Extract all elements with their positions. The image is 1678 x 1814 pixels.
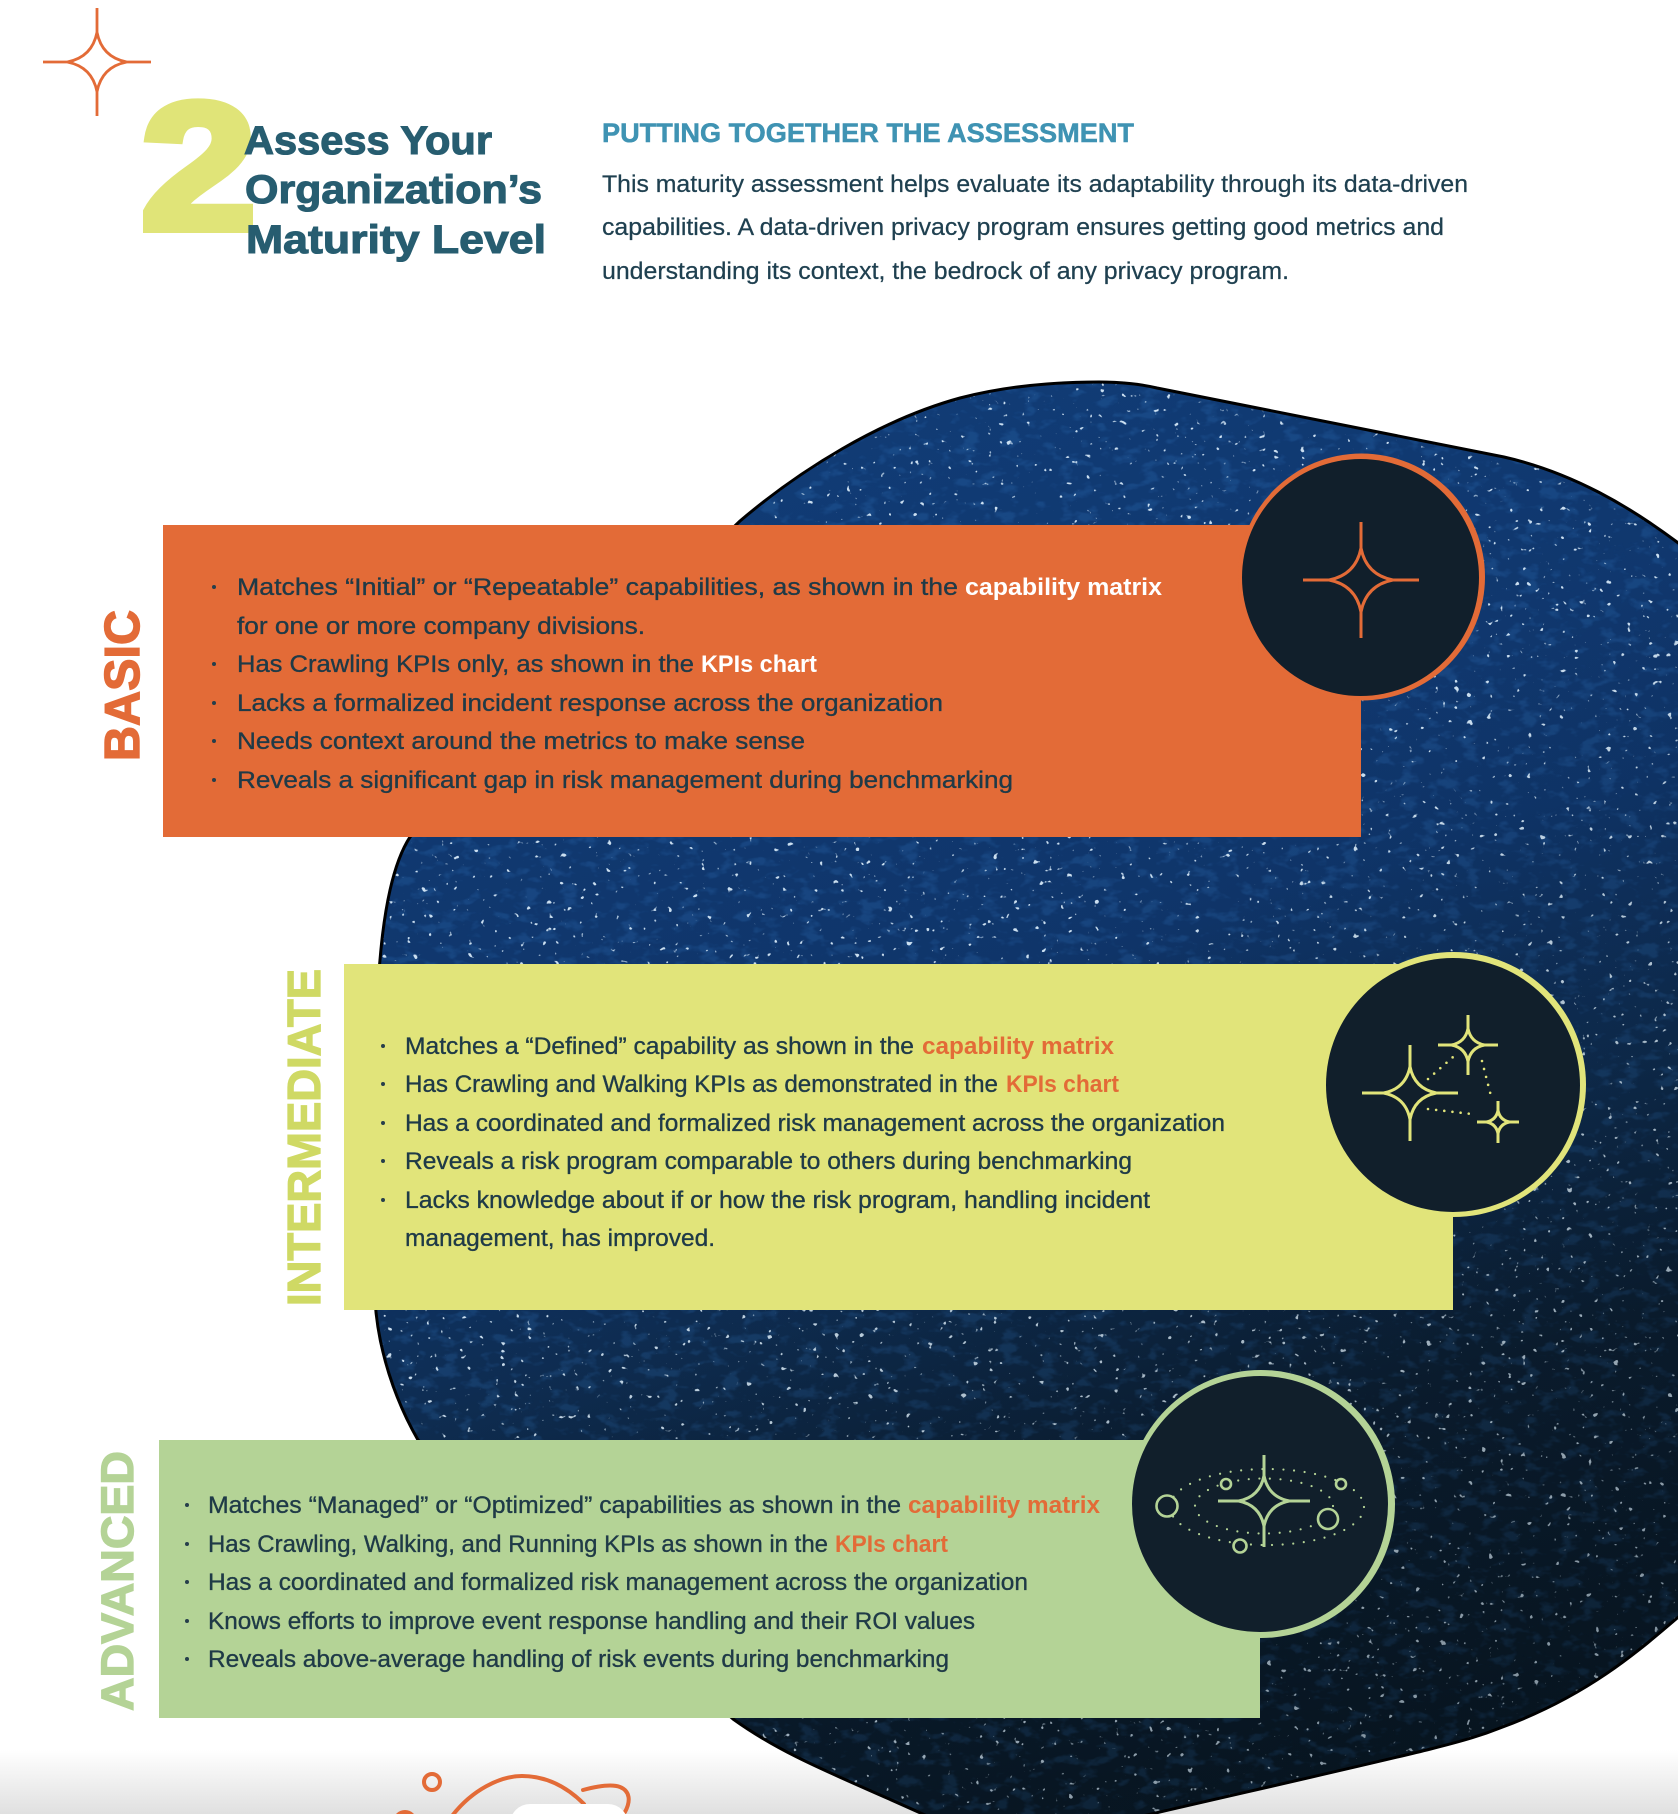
- bottom grey fade: [0, 1750, 1678, 1814]
- intro paragraph: [602, 171, 1468, 285]
- title: [244, 119, 546, 262]
- advanced list: [185, 1492, 1101, 1673]
- intermediate list: Reveals a risk program comparable to others during benchmarking: [405, 1148, 1132, 1175]
- advanced list: Reveals above-average handling of risk events during benchmarking: [208, 1646, 949, 1673]
- advanced list: Has Crawling, Walking, and Running KPIs as shown in the: [208, 1531, 828, 1558]
- intermediate box: [344, 964, 1453, 1310]
- advanced list: Has a coordinated and formalized risk management across the organization: [208, 1569, 1028, 1596]
- intermediate list: Lacks knowledge about if or how the risk program, handling incident: [405, 1187, 1150, 1214]
- icon: single star badge: [1238, 454, 1485, 700]
- intermediate list: [381, 1033, 1225, 1252]
- panel: advanced: [92, 1370, 1395, 1718]
- basic list: KPIs chart: [701, 651, 817, 678]
- intermediate list: Has Crawling and Walking KPIs as demonstrated in the: [405, 1071, 998, 1098]
- advanced list: capability matrix: [908, 1492, 1101, 1519]
- intro heading: PUTTING TOGETHER THE ASSESSMENT: [602, 118, 1134, 148]
- intermediate label: INTERMEDIATE: [278, 969, 330, 1306]
- basic list: for one or more company divisions.: [237, 613, 645, 640]
- panel: intermediate: [278, 952, 1586, 1310]
- advanced list: Matches “Managed” or “Optimized” capabilities as shown in the: [208, 1492, 901, 1519]
- big number 2: 2: [141, 66, 256, 267]
- basic box: [163, 525, 1361, 837]
- intermediate list: KPIs chart: [1006, 1071, 1119, 1098]
- intro paragraph: This maturity assessment helps evaluate its adaptability through its data-driven: [602, 171, 1468, 198]
- title: Assess Your: [244, 119, 492, 163]
- basic list: Needs context around the metrics to make sense: [237, 728, 805, 755]
- advanced list: Knows efforts to improve event response handling and their ROI values: [208, 1608, 975, 1635]
- intermediate list: management, has improved.: [405, 1225, 715, 1252]
- basic list: Has Crawling KPIs only, as shown in the: [237, 651, 694, 678]
- panel: basic: [96, 454, 1485, 837]
- advanced box: [159, 1440, 1260, 1718]
- basic list: Matches “Initial” or “Repeatable” capabilities, as shown in the: [237, 574, 958, 601]
- icon: cropped orange orbit at bottom: [393, 1774, 629, 1814]
- title: Organization’s: [245, 168, 542, 212]
- starry sky blob: [360, 370, 1678, 1814]
- basic list: Reveals a significant gap in risk management during benchmarking: [237, 767, 1013, 794]
- intro paragraph: capabilities. A data-driven privacy program ensures getting good metrics and: [602, 214, 1444, 241]
- basic list: [212, 574, 1163, 794]
- intermediate list: Has a coordinated and formalized risk management across the organization: [405, 1110, 1225, 1137]
- basic label: BASIC: [96, 610, 150, 761]
- intro paragraph: understanding its context, the bedrock of any privacy program.: [602, 258, 1289, 285]
- basic list: capability matrix: [965, 574, 1163, 601]
- icon: galaxy badge: [1127, 1370, 1395, 1638]
- advanced list: KPIs chart: [835, 1531, 948, 1558]
- advanced label: ADVANCED: [92, 1451, 143, 1711]
- intermediate list: Matches a “Defined” capability as shown in the: [405, 1033, 914, 1060]
- basic list: Lacks a formalized incident response across the organization: [237, 690, 943, 717]
- title: Maturity Level: [246, 218, 546, 262]
- intermediate list: capability matrix: [922, 1033, 1115, 1060]
- icon: orange corner star: [43, 8, 151, 116]
- icon: three star constellation badge: [1321, 952, 1586, 1217]
